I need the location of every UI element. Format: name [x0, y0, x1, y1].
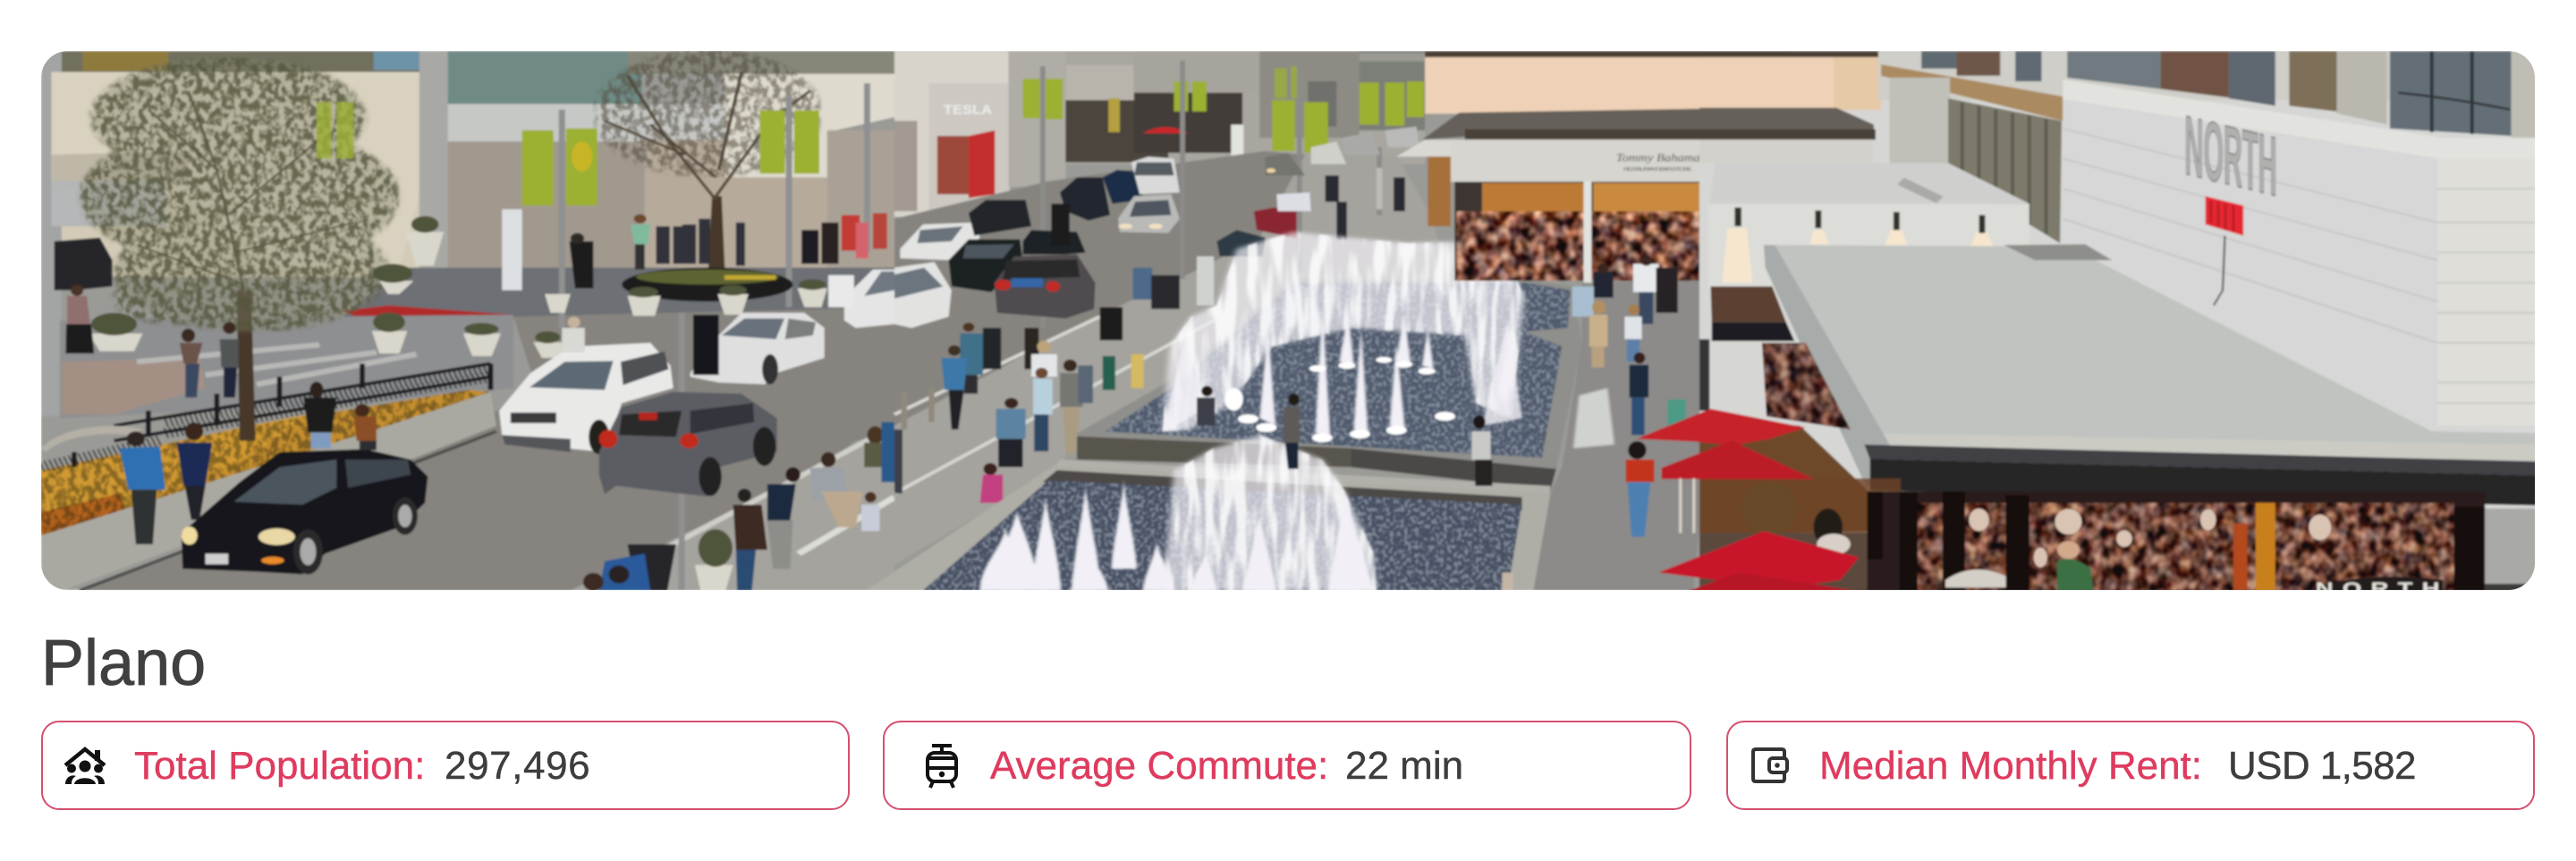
white siding wall [2063, 80, 2538, 434]
restaurant small sign line: RESTAURANT | BAR | STORE [1623, 167, 1692, 172]
Tommy Bahama restaurant [1360, 51, 1793, 286]
red patio umbrellas [1636, 409, 1859, 591]
road [80, 308, 894, 591]
sign column [502, 209, 522, 291]
partly visible white car [828, 269, 894, 328]
banners and poles [1023, 66, 1424, 153]
road and promenade [894, 151, 1305, 426]
lower box with wall lights [1707, 163, 2029, 289]
Tesla building and far shops [894, 51, 1425, 217]
left building [41, 51, 894, 417]
icon: house with people [64, 747, 106, 784]
white sedan [691, 313, 825, 384]
NORTH building sign: NORTH [2184, 97, 2277, 214]
value: USD 1,582: USD 1,582 [2228, 744, 2416, 788]
city heading: Plano: Plano [41, 628, 206, 699]
upper fountain pool [1055, 279, 1582, 494]
TESLA storefront sign: TESLA [944, 102, 992, 118]
splash by right walkway [1573, 388, 1614, 448]
grey SUV [599, 392, 777, 496]
right walkway [1533, 279, 1710, 591]
centre section of the street [866, 51, 1793, 591]
upper floors with windows [1699, 51, 2538, 243]
pergola and side shop [1699, 286, 1901, 591]
lower fountain pool [866, 465, 1550, 591]
card: median monthly rent [1726, 721, 2535, 810]
icon: wallet [1751, 747, 1789, 783]
left section of the street [41, 49, 894, 591]
pedestrians on the promenade [894, 168, 1405, 502]
label: Median Monthly Rent: Median Monthly Rent: [1819, 744, 2202, 788]
card: average commute [883, 721, 1691, 810]
large flat roof [1764, 244, 2538, 505]
label: Total Population: Total Population: [134, 744, 425, 788]
plaza pavement [343, 267, 894, 320]
value: 22 min: 22 min [1345, 744, 1463, 788]
pedestrians on the left [65, 213, 894, 591]
North restaurant interior [1868, 492, 2538, 598]
black sedan [182, 449, 428, 574]
parked SUV behind tree [55, 238, 113, 291]
light poles [562, 83, 867, 591]
people standing in front of the fountain [1197, 386, 1492, 485]
bare tree [593, 49, 821, 286]
red sign and wire [2206, 196, 2243, 305]
flower bed and concrete wall [41, 364, 496, 591]
cars on the street [894, 127, 1419, 341]
card: total population [41, 721, 850, 810]
icon: tram [926, 744, 958, 789]
pedestrians by the restaurant [1502, 256, 1686, 591]
NORTH restaurant sign: NORTH [2316, 579, 2440, 598]
tree with foliage [80, 57, 399, 441]
right section: North building [1636, 51, 2538, 598]
Tommy Bahama sign: Tommy Bahama [1616, 152, 1700, 165]
value: 297,496: 297,496 [445, 744, 590, 788]
white SUV [499, 343, 674, 454]
white planters [89, 232, 827, 591]
label: Average Commute: Average Commute: [990, 744, 1328, 788]
banners [317, 102, 819, 206]
raised round planter [622, 267, 793, 301]
fountain jets [980, 232, 1525, 591]
